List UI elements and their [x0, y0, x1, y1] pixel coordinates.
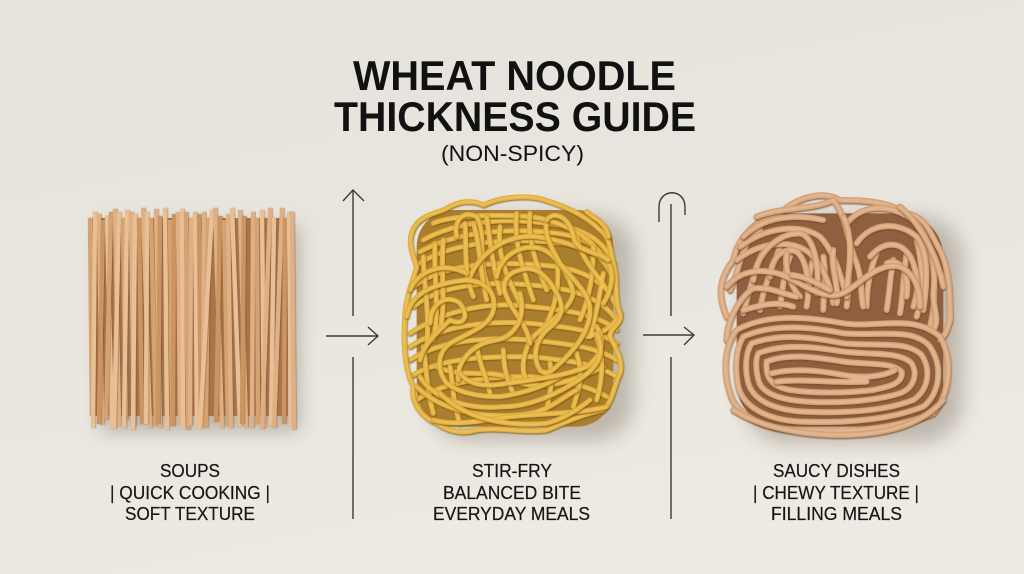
caption: saucy dishes — [753, 461, 919, 524]
flow arrow group 2 — [643, 193, 694, 519]
title: THICKNESS GUIDE — [334, 93, 696, 140]
caption: stir-fry: BALANCED BITE — [443, 483, 581, 503]
noodle nest: medium yellow — [404, 197, 633, 440]
noodle nest: thick tan — [721, 195, 963, 443]
caption: stir-fry: EVERYDAY MEALS — [433, 504, 590, 524]
caption: soups — [110, 461, 270, 524]
title — [334, 52, 696, 140]
caption: soups: SOFT TEXTURE — [125, 504, 255, 524]
noodle bundle: thin straight strands — [86, 208, 300, 432]
caption: soups: SOUPS — [160, 461, 220, 481]
caption: saucy dishes: SAUCY DISHES — [773, 461, 900, 481]
caption: soups: | QUICK COOKING | — [110, 483, 270, 503]
caption: saucy dishes: FILLING MEALS — [771, 504, 902, 524]
caption: stir-fry — [433, 461, 590, 524]
caption: saucy dishes: | CHEWY TEXTURE | — [753, 483, 919, 503]
flow arrow group 1 — [326, 190, 378, 519]
title: WHEAT NOODLE — [353, 52, 676, 99]
subtitle: (NON-SPICY) — [441, 141, 584, 166]
caption: stir-fry: STIR-FRY — [472, 461, 552, 481]
